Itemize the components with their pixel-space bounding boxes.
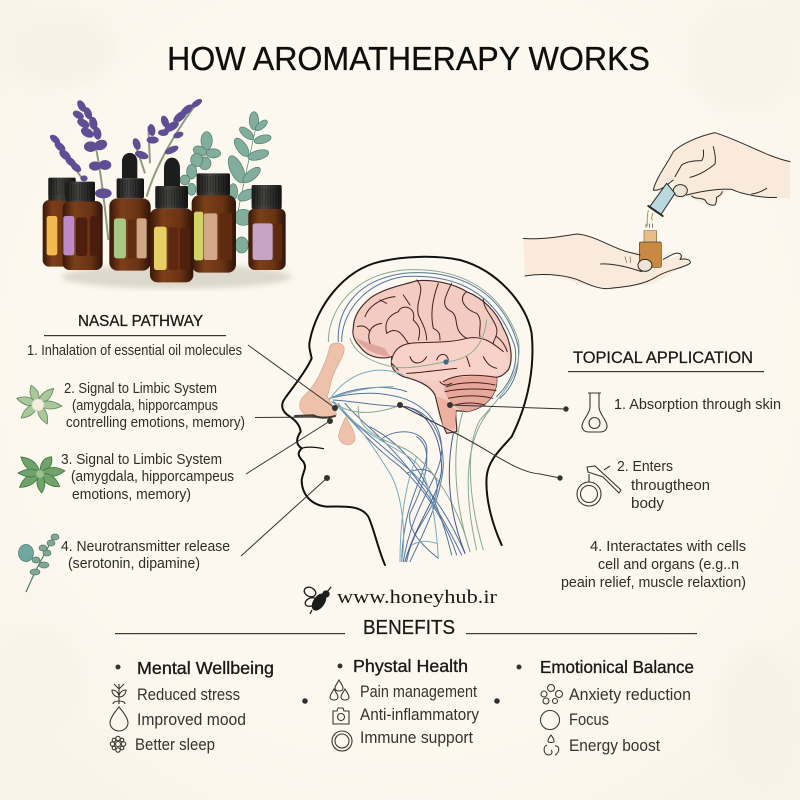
benefit column: emotional balance: Anxiety reduction xyxy=(569,686,691,704)
mouth line xyxy=(302,447,323,449)
head outline xyxy=(282,257,532,565)
icon: bottle 3 with dropper xyxy=(109,153,151,271)
icon: drop xyxy=(110,707,128,731)
heading: topical application: TOPICAL APPLICATION xyxy=(573,349,753,367)
icon: round flask xyxy=(582,393,607,432)
text: topical step 2: body xyxy=(631,496,665,512)
benefit column: mental wellbeing: Mental Wellbeing xyxy=(137,658,274,678)
text: topical step 2: througtheon xyxy=(631,478,710,494)
benefit column: physical health: Anti-inflammatory xyxy=(360,706,480,724)
benefit column: physical health: Phystal Health xyxy=(353,656,468,676)
icon: blossom xyxy=(110,736,126,752)
benefit column: emotional balance xyxy=(516,657,694,755)
olfactory nerves xyxy=(328,270,519,562)
icon: flowering herb xyxy=(16,384,62,426)
text: topical step 1: 1. Absorption through skin xyxy=(614,397,781,413)
benefit column: physical health xyxy=(330,656,480,751)
icon: bottle 1 xyxy=(43,178,76,267)
icon: circles cluster xyxy=(541,684,562,704)
benefit column: emotional balance: Energy boost xyxy=(569,737,660,755)
illustration: hands dropping oil xyxy=(523,133,790,290)
icon: eucalyptus sprig xyxy=(18,534,59,592)
text: nasal step 2: 2. Signal to Limbic System xyxy=(64,381,217,397)
text: topical step 2 xyxy=(617,459,710,512)
pointer lines: nasal pathway xyxy=(241,345,338,556)
text: topical step 4: 4. Interactates with cells xyxy=(590,539,746,555)
icon: double circle xyxy=(332,731,352,751)
text: nasal step 3: (amygdala, hipporcampeus xyxy=(71,469,234,485)
text: nasal step 3 xyxy=(61,452,234,503)
icon: bottle 5 xyxy=(192,173,236,273)
illustration: essential oil bottles with lavender and eucalyptus xyxy=(43,97,292,289)
icon: bottle 6 xyxy=(248,185,286,270)
text: nasal step 2: (amygdala, hipporcampus xyxy=(72,398,218,414)
benefit column: mental wellbeing: Reduced stress xyxy=(137,686,240,704)
icon: droplets xyxy=(330,680,349,700)
separator dot xyxy=(302,698,308,704)
head and brain diagram xyxy=(282,257,532,565)
icon: bee xyxy=(303,585,331,614)
text: topical step 2: 2. Enters xyxy=(617,459,673,475)
benefit column: mental wellbeing: Better sleep xyxy=(135,736,215,754)
benefit column: physical health: Immune support xyxy=(360,729,473,747)
heading: nasal pathway: NASAL PATHWAY xyxy=(78,313,203,330)
benefit column: mental wellbeing xyxy=(110,658,274,754)
lower hand with bottle xyxy=(523,231,690,290)
separator dot xyxy=(494,698,500,704)
text: nasal step 3: emotions, memory) xyxy=(72,487,191,503)
pointer lines: topical application xyxy=(398,402,568,480)
title: HOW AROMATHERAPY WORKS xyxy=(167,41,650,78)
icon: eucalyptus branches xyxy=(180,112,272,253)
icon: retort flask xyxy=(577,466,621,506)
website: www.honeyhub.ir xyxy=(337,587,498,608)
icon: bottle 2 xyxy=(63,182,103,270)
upper hand xyxy=(653,133,790,205)
benefit column: emotional balance: Emotionical Balance xyxy=(540,657,694,677)
icon: square with circle xyxy=(333,708,349,724)
icon: bottle 4 with dropper xyxy=(150,158,193,282)
icon: energy drops xyxy=(544,735,559,755)
benefit column: mental wellbeing: Improved mood xyxy=(137,711,246,729)
nose and olfactory bulb xyxy=(295,343,355,445)
text: nasal step 1: 1. Inhalation of essential oil molecules xyxy=(27,343,242,359)
icon: lavender sprigs xyxy=(48,97,204,240)
icon: mint leaves xyxy=(17,453,65,493)
benefit column: physical health: Pain management xyxy=(360,683,477,701)
text: topical step 4 xyxy=(561,539,746,591)
benefit column: emotional balance: Focus xyxy=(569,711,609,729)
text: nasal step 2 xyxy=(64,381,245,431)
text: topical step 4: peain relief, muscle relaxtion) xyxy=(561,575,746,591)
text: nasal step 3: 3. Signal to Limbic System xyxy=(61,452,222,468)
text: nasal step 4: 4. Neurotransmitter release xyxy=(61,539,230,555)
text: nasal step 2: contrelling emotions, memory) xyxy=(66,415,245,431)
text: topical step 4: cell and organs (e.g..n xyxy=(598,557,739,573)
icon: circle xyxy=(540,710,560,730)
text: nasal step 4: (serotonin, dipamine) xyxy=(68,556,200,572)
icon: sprout xyxy=(112,684,126,704)
dropper vial xyxy=(646,183,675,227)
text: nasal step 4 xyxy=(61,539,230,572)
heading: benefits: BENEFITS xyxy=(363,616,455,639)
brain xyxy=(350,280,511,433)
